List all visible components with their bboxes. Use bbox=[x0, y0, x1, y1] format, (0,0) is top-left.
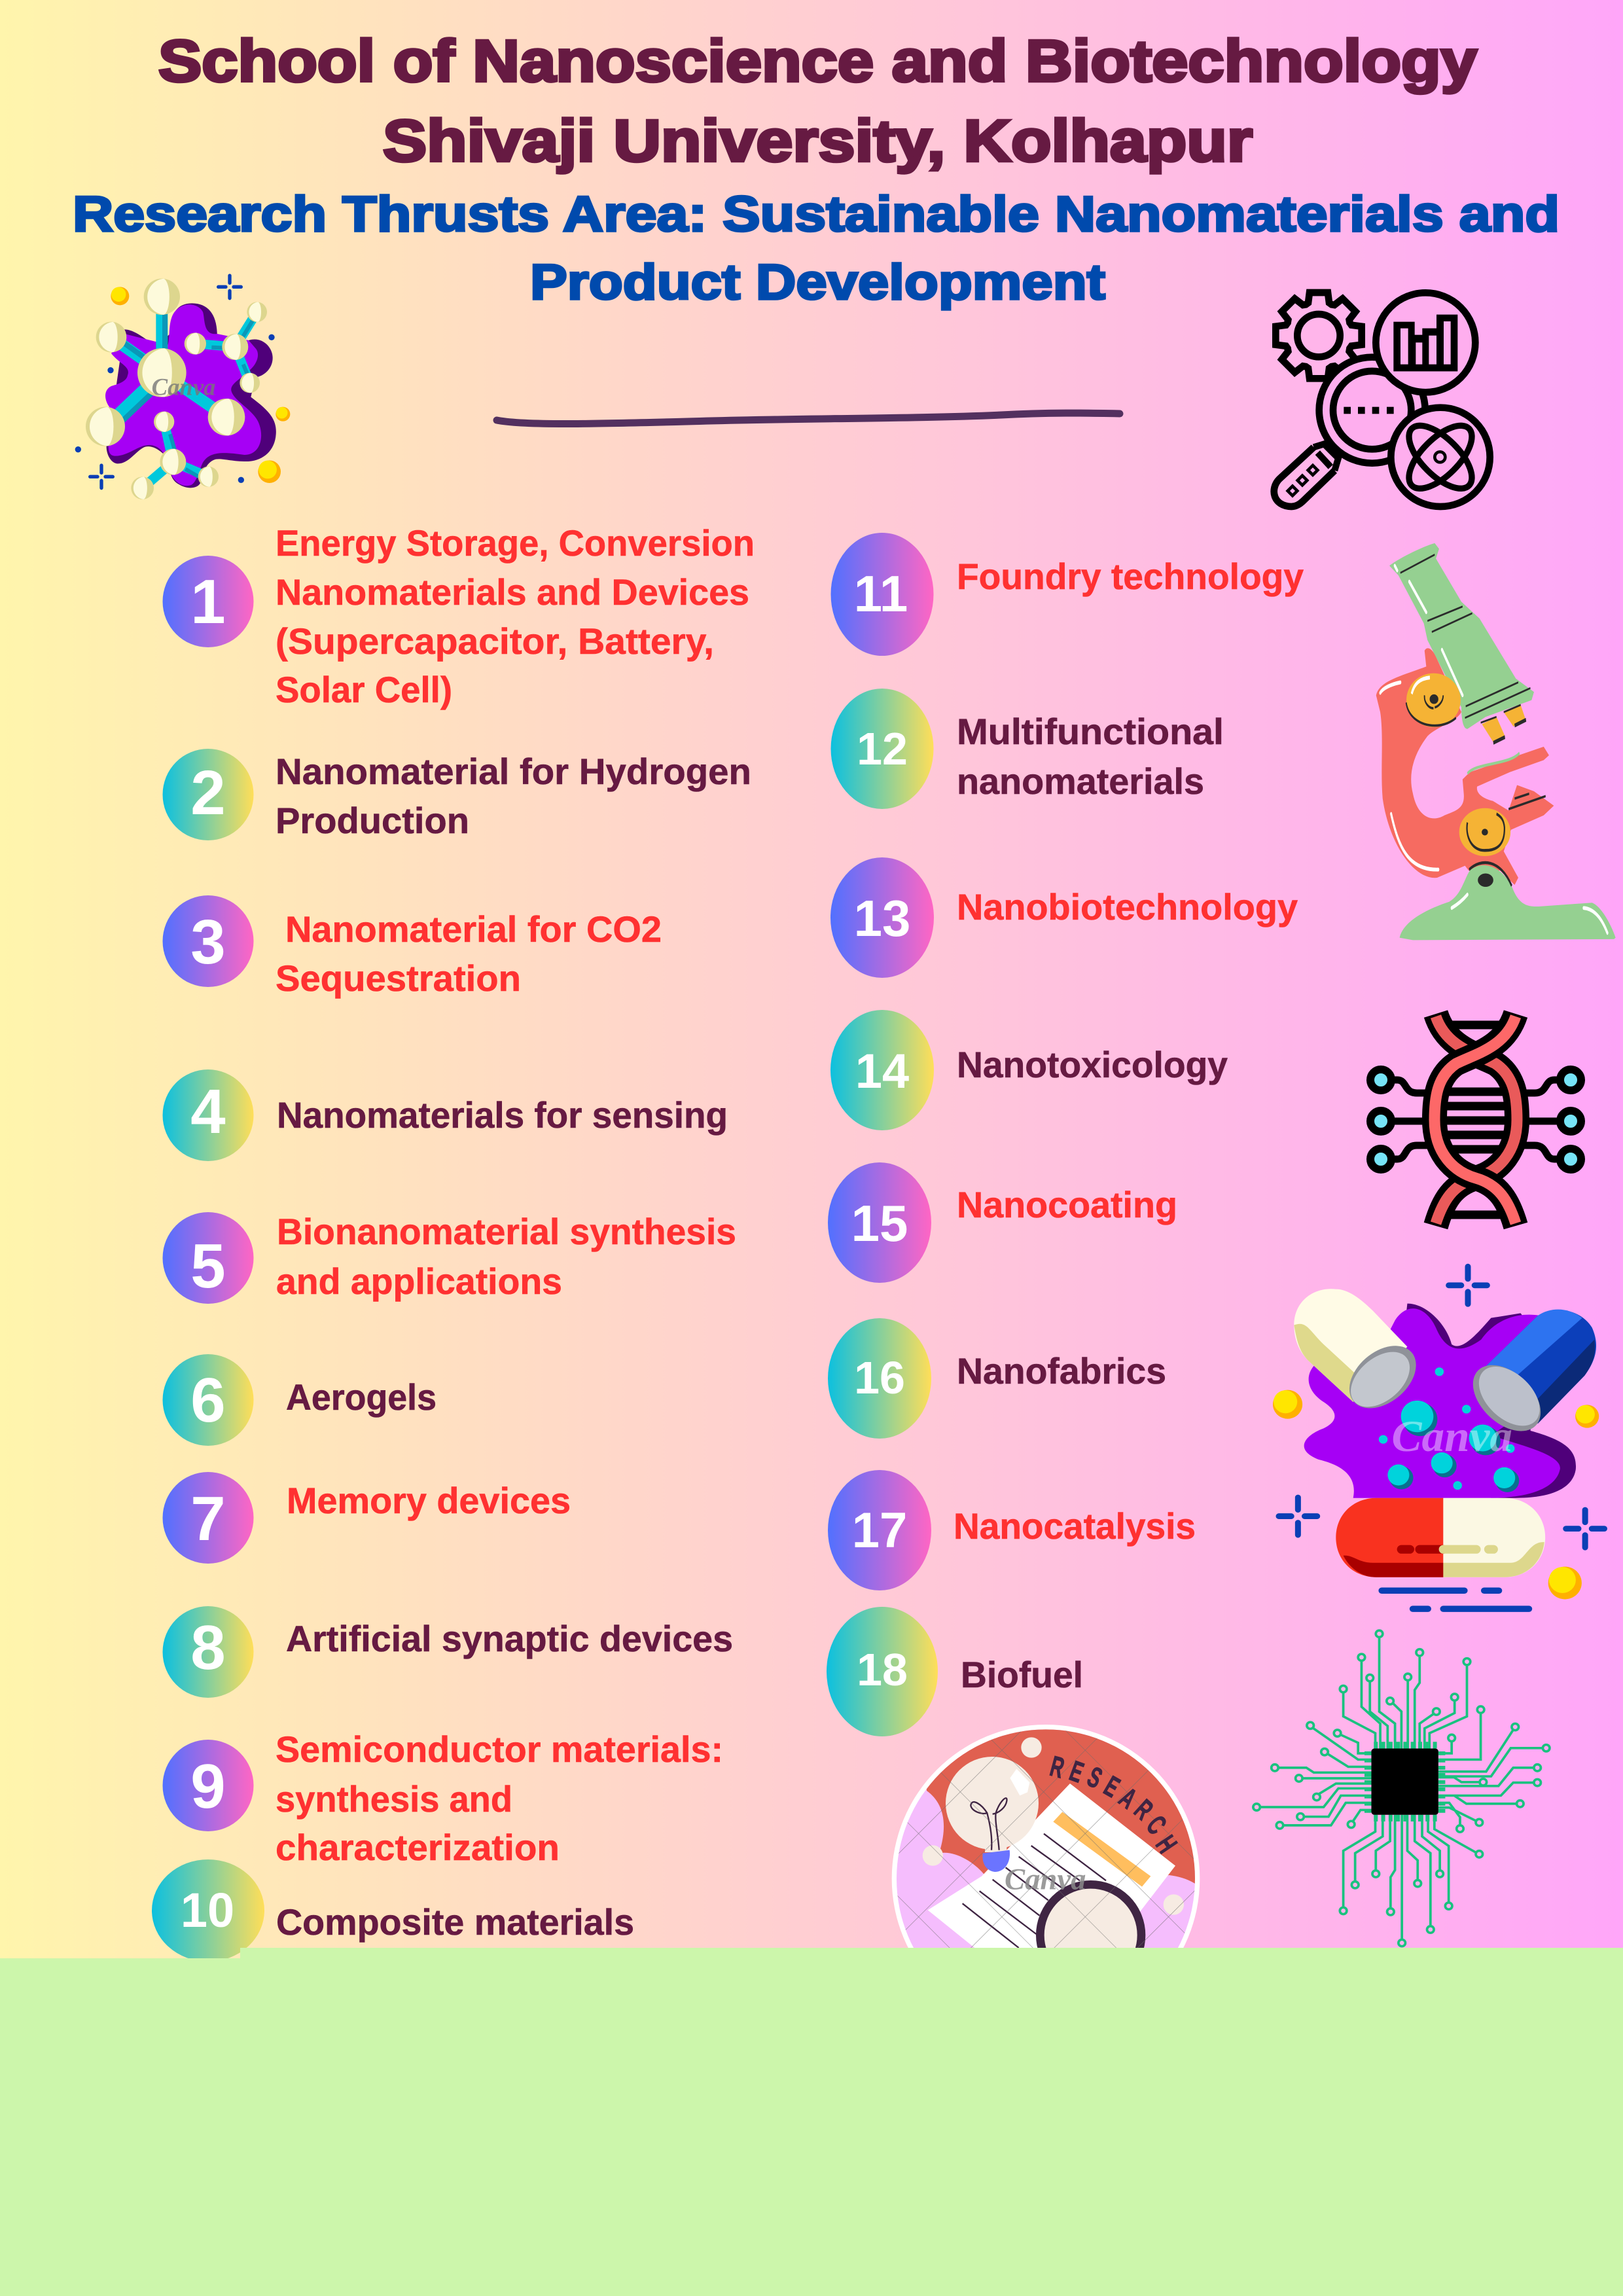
item 10: 10 bbox=[181, 1883, 234, 1937]
item 18: 18 bbox=[857, 1644, 908, 1695]
item 1: 1 bbox=[190, 567, 226, 637]
item 12: Multifunctional bbox=[957, 711, 1224, 752]
item 2: 2 bbox=[190, 758, 226, 828]
item 14 bbox=[830, 1010, 1228, 1130]
item 11: 11 bbox=[854, 565, 908, 622]
item 17: 17 bbox=[852, 1503, 907, 1558]
subtitle line 2: Product Development bbox=[530, 255, 1105, 310]
item 1: Solar Cell) bbox=[276, 669, 452, 710]
item 7 bbox=[162, 1472, 571, 1564]
item 18: Biofuel bbox=[961, 1654, 1083, 1695]
item 8: Artificial synaptic devices bbox=[286, 1618, 733, 1659]
subtitle line 1: Research Thrusts Area: Sustainable Nanomaterials and bbox=[73, 187, 1560, 242]
badge lettering: E bbox=[1065, 1755, 1088, 1789]
icon: microscope bbox=[1376, 543, 1616, 940]
item 7: 7 bbox=[190, 1484, 226, 1554]
item 15 bbox=[828, 1162, 1177, 1283]
item 6: 6 bbox=[190, 1365, 226, 1435]
item 3: 3 bbox=[190, 907, 226, 977]
item 9: characterization bbox=[276, 1827, 560, 1868]
item 2: Nanomaterial for Hydrogen bbox=[276, 751, 751, 792]
item 4: 4 bbox=[190, 1077, 226, 1147]
icon: research badge: Canva bbox=[1005, 1863, 1086, 1897]
item 5 bbox=[162, 1211, 736, 1304]
badge lettering: E bbox=[1099, 1770, 1125, 1804]
badge lettering: H bbox=[1150, 1830, 1183, 1859]
item 16 bbox=[828, 1318, 1166, 1439]
left list: topics 1 to 10 bbox=[152, 522, 755, 1962]
item 17 bbox=[828, 1470, 1196, 1590]
item 13 bbox=[830, 857, 1298, 978]
item 12: 12 bbox=[857, 723, 908, 774]
item 3 bbox=[162, 895, 662, 999]
right list: topics 11 to 18 bbox=[827, 533, 1304, 1736]
green bottom panel bbox=[0, 1948, 1623, 2296]
icon: circuit chip bbox=[1253, 1630, 1550, 1946]
item 4 bbox=[162, 1069, 728, 1161]
icon: magnifier gear chart atom bbox=[1274, 293, 1490, 507]
item 15: 15 bbox=[851, 1194, 908, 1252]
item 2: Production bbox=[276, 800, 469, 841]
icon: capsules on purple blob: Canva bbox=[1391, 1412, 1512, 1461]
badge lettering: R bbox=[1047, 1749, 1067, 1784]
item 12 bbox=[831, 689, 1224, 809]
icon: molecule on purple blob: Canva bbox=[152, 373, 215, 400]
icon: molecule on purple blob bbox=[75, 276, 290, 499]
item 9 bbox=[162, 1729, 723, 1868]
item 1 bbox=[162, 522, 755, 710]
item 5: and applications bbox=[276, 1261, 562, 1302]
item 7: Memory devices bbox=[287, 1480, 571, 1521]
item 9: 9 bbox=[190, 1751, 226, 1821]
item 10: Composite materials bbox=[276, 1901, 634, 1943]
item 13: 13 bbox=[854, 889, 910, 947]
item 11 bbox=[831, 533, 1304, 656]
item 5: 5 bbox=[190, 1231, 226, 1301]
item 6: Aerogels bbox=[286, 1376, 437, 1418]
item 8: 8 bbox=[190, 1613, 226, 1683]
icon: capsules on purple blob bbox=[1273, 1266, 1604, 1609]
item 6 bbox=[162, 1354, 437, 1446]
item 1: (Supercapacitor, Battery, bbox=[276, 620, 714, 662]
item 16: 16 bbox=[854, 1352, 905, 1403]
item 1: Energy Storage, Conversion bbox=[276, 522, 755, 564]
item 13: Nanobiotechnology bbox=[957, 886, 1298, 927]
badge lettering: R bbox=[1128, 1793, 1160, 1826]
item 1: Nanomaterials and Devices bbox=[276, 571, 749, 613]
icon: DNA helix with circuit nodes bbox=[1370, 1014, 1581, 1226]
item 9: Semiconductor materials: bbox=[276, 1729, 723, 1770]
item 12: nanomaterials bbox=[957, 761, 1204, 802]
item 8 bbox=[162, 1606, 733, 1698]
item 3: Sequestration bbox=[276, 958, 521, 999]
header titles bbox=[73, 29, 1560, 310]
item 14: Nanotoxicology bbox=[957, 1044, 1228, 1085]
divider stroke bbox=[497, 413, 1120, 424]
item 16: Nanofabrics bbox=[957, 1350, 1166, 1391]
item 10 bbox=[152, 1859, 634, 1962]
item 5: Bionanomaterial synthesis bbox=[277, 1211, 736, 1252]
title line 1: School of Nanoscience and Biotechnology bbox=[158, 29, 1477, 94]
item 9: synthesis and bbox=[276, 1778, 512, 1820]
item 11: Foundry technology bbox=[957, 556, 1304, 597]
item 17: Nanocatalysis bbox=[954, 1505, 1196, 1547]
title line 2: Shivaji University, Kolhapur bbox=[383, 109, 1253, 174]
item 18 bbox=[827, 1607, 1083, 1736]
badge lettering bbox=[1047, 1749, 1183, 1859]
badge lettering: A bbox=[1113, 1781, 1143, 1815]
badge lettering: S bbox=[1082, 1761, 1107, 1795]
item 14: 14 bbox=[855, 1044, 909, 1098]
item 3: Nanomaterial for CO2 bbox=[285, 908, 662, 950]
item 15: Nanocoating bbox=[957, 1184, 1177, 1225]
item 4: Nanomaterials for sensing bbox=[277, 1094, 728, 1136]
badge lettering: C bbox=[1140, 1809, 1173, 1840]
icon: research badge bbox=[891, 1725, 1200, 1948]
item 2 bbox=[162, 749, 751, 841]
